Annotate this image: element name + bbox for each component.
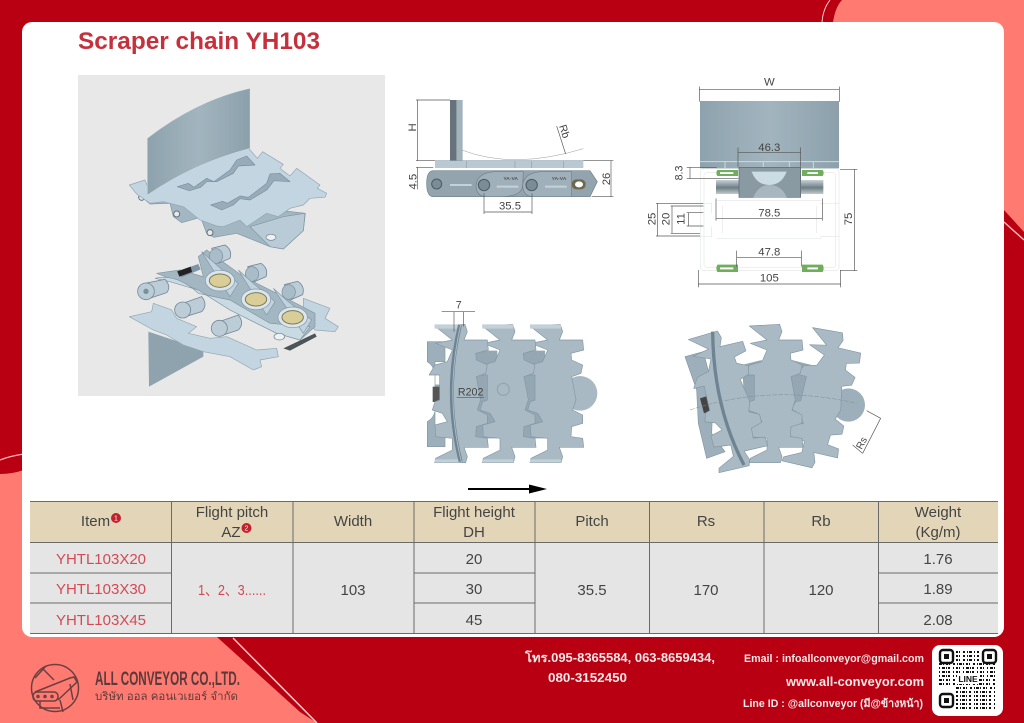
rotated view drawing: Rs — [855, 435, 870, 451]
table body: 170 — [693, 582, 719, 599]
table body: 35.5 — [577, 582, 607, 599]
table header row: AZ — [221, 524, 241, 541]
contact details: www.all-conveyor.com — [785, 675, 924, 689]
front section drawing: 47.8 — [758, 246, 780, 258]
table body: 1.76 — [923, 551, 953, 568]
table body: 120 — [808, 582, 834, 599]
side view drawing: 26 — [601, 173, 613, 185]
table body: YHTL103X45 — [56, 612, 146, 629]
front section drawing: 105 — [760, 272, 779, 284]
table header row — [30, 501, 998, 543]
table header row: Item — [81, 513, 110, 530]
rotated view drawing — [682, 324, 881, 474]
side view drawing — [407, 100, 613, 214]
table body: 2.08 — [923, 612, 953, 629]
contact details: Line ID : @allconveyor (มี@ข้างหน้า) — [743, 697, 923, 710]
table header row: Weight — [915, 504, 962, 521]
front section drawing: 46.3 — [758, 142, 780, 154]
LINE QR code: LINE — [958, 674, 978, 684]
side view drawing: YA-VA — [503, 176, 518, 182]
table header row: Width — [334, 513, 372, 530]
table header row: Pitch — [575, 513, 609, 530]
front section drawing: W — [764, 76, 775, 88]
company name: บริษัท ออล คอนเวเยอร์ จำกัด — [95, 690, 238, 703]
plan view drawing — [427, 300, 597, 463]
table body — [30, 543, 998, 633]
phone numbers: โทร.095-8365584, 063-8659434, — [524, 650, 715, 665]
side view drawing: YA-VA — [552, 176, 567, 182]
exploded isometric photo panel — [78, 75, 385, 396]
company logo icon — [32, 664, 78, 712]
title: Scraper chain YH103 — [78, 28, 320, 55]
table header row: Flight height — [433, 504, 516, 521]
table body: 1、2、3...... — [198, 582, 266, 599]
plan view drawing: R202 — [458, 386, 483, 398]
company name — [95, 669, 240, 703]
front section drawing: 25 — [647, 213, 659, 225]
table header row: (Kg/m) — [916, 524, 961, 541]
plan view drawing: 7 — [456, 300, 462, 312]
table body: 20 — [466, 551, 482, 568]
front section drawing: 8.3 — [673, 166, 685, 180]
table header row: Rs — [697, 513, 715, 530]
table body: 30 — [466, 581, 482, 598]
table header row: DH — [463, 524, 485, 541]
table body: 45 — [466, 612, 482, 629]
company name: ALL CONVEYOR CO.,LTD. — [95, 669, 240, 690]
side view drawing: H — [407, 123, 419, 131]
table header row: Rb — [811, 513, 831, 530]
upper chain assembly — [129, 88, 327, 249]
table body: YHTL103X20 — [56, 551, 146, 568]
table body: 103 — [340, 582, 366, 599]
front section drawing: 11 — [675, 213, 687, 225]
phone numbers — [524, 650, 715, 685]
side view drawing: 35.5 — [499, 200, 521, 212]
table body: YHTL103X30 — [56, 581, 146, 598]
specification table — [30, 501, 998, 634]
front section drawing: 78.5 — [758, 208, 780, 220]
front section drawing: 75 — [843, 213, 855, 225]
phone numbers: 080-3152450 — [548, 671, 627, 685]
table header row: 2 — [245, 526, 249, 532]
lower chain assembly — [129, 245, 338, 387]
side view drawing: 4.5 — [408, 174, 420, 190]
LINE QR code — [932, 645, 1003, 716]
direction arrow — [468, 484, 547, 494]
table header row: Flight pitch — [196, 504, 268, 521]
front section drawing: 20 — [660, 213, 672, 225]
contact details: Email : infoallconveyor@gmail.com — [744, 653, 924, 665]
front section drawing — [647, 76, 857, 287]
table header row: 1 — [114, 516, 118, 522]
table body: 1.89 — [923, 581, 953, 598]
contact details — [743, 653, 924, 710]
side view drawing: Rb — [556, 123, 572, 140]
